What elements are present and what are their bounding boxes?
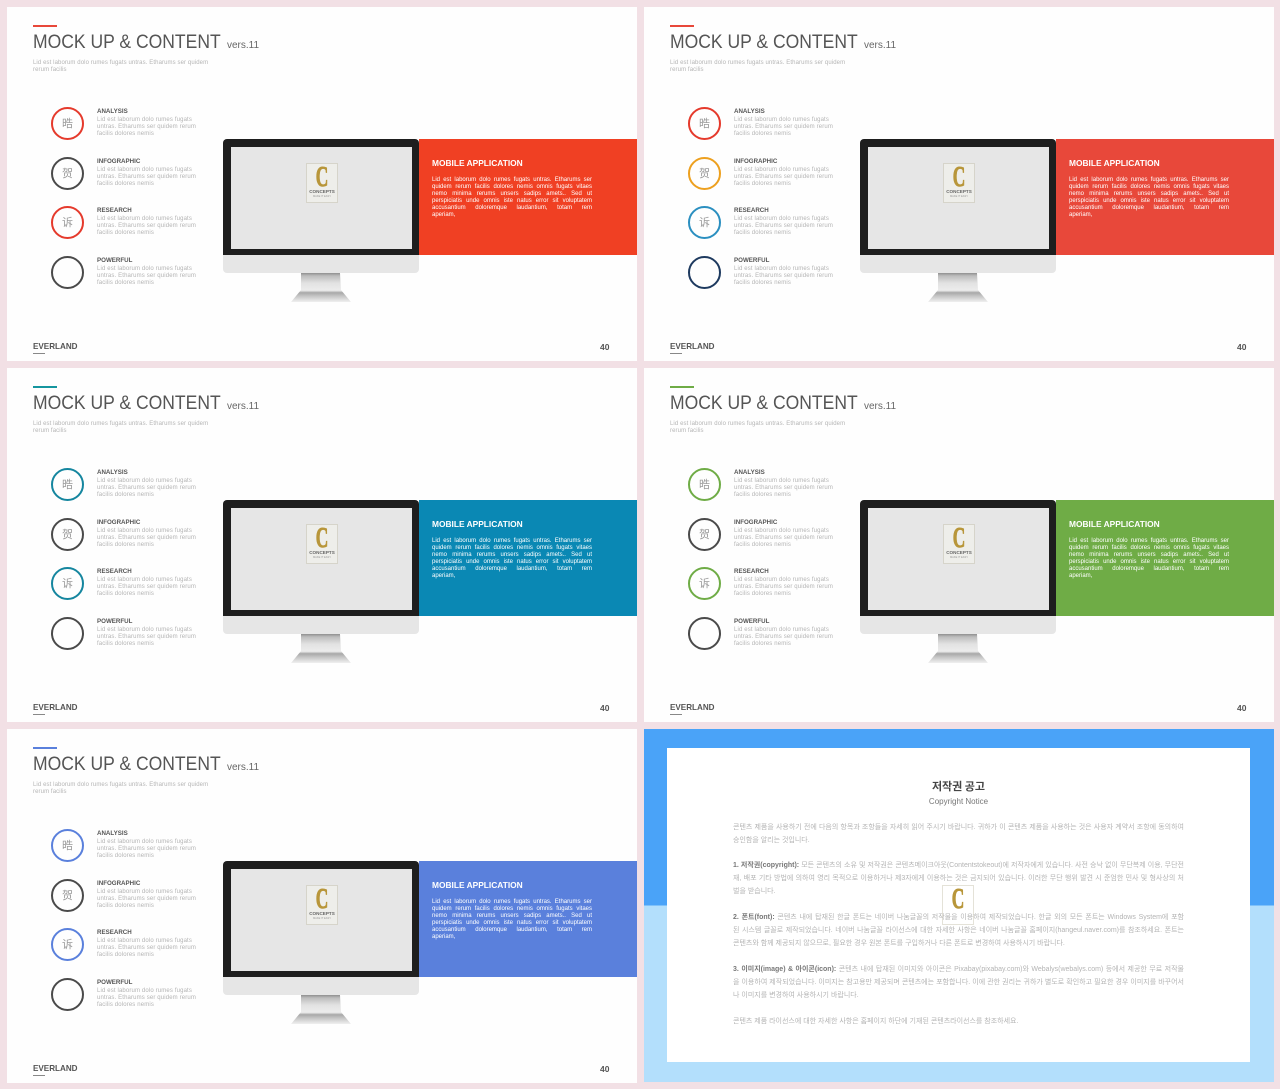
- band heading: MOBILE APPLICATION: [1069, 158, 1160, 168]
- footer brand: EVERLAND: [33, 1064, 78, 1073]
- infographic text: facilis dolores nemis: [97, 903, 154, 909]
- title accent line: [670, 386, 694, 388]
- analysis text: untras. Etharums ser quidem rerum: [97, 124, 196, 130]
- band text: quidem rerum facilis dolores nemis omnis fugats vitaes: [432, 906, 592, 912]
- band text: nemo minima rerums unsers sadips amets.. Sed ut: [432, 552, 592, 558]
- title accent line: [33, 747, 57, 749]
- footer brand: EVERLAND: [33, 342, 78, 351]
- white notice sheet: 벌을 받습니다.: [733, 888, 776, 895]
- research text: Lid est laborum dolo rumes fugats: [734, 216, 829, 222]
- band text: [432, 538, 592, 579]
- band heading: MOBILE APPLICATION: [432, 158, 523, 168]
- infographic text: Lid est laborum dolo rumes fugats: [97, 167, 192, 173]
- research text: facilis dolores nemis: [97, 230, 154, 236]
- logo: CONCEPTS: [309, 550, 335, 554]
- title: vers.11: [864, 401, 896, 412]
- logo: MAKE IT EASY: [950, 194, 968, 198]
- title: MOCK UP & CONTENT: [33, 31, 221, 53]
- icon: analysis ring: 晧: [62, 476, 73, 492]
- powerful text: Lid est laborum dolo rumes fugats: [97, 626, 192, 632]
- powerful text: [97, 618, 196, 646]
- band text: Lid est laborum dolo rumes fugats untras. Etharums ser: [432, 538, 592, 544]
- icon: research ring: [51, 928, 84, 961]
- slide 4: green: [644, 368, 1274, 722]
- research text: facilis dolores nemis: [97, 591, 154, 597]
- white notice sheet: 콘텐츠와 함께 제공되지 않으므로, 필요한 경우 원본 폰트를 구입하거나 다른 폰트로 변경하여 사용하시기 바랍니다.: [733, 940, 1065, 947]
- footer brand: EVERLAND: [670, 342, 715, 351]
- footer brand: EVERLAND: [670, 703, 715, 712]
- band text: aperiam,: [432, 212, 455, 218]
- item: powerful: [51, 617, 196, 650]
- powerful text: facilis dolores nemis: [734, 640, 791, 646]
- item: infographic: [688, 518, 833, 551]
- powerful text: [734, 256, 833, 286]
- icon: analysis ring: 晧: [62, 836, 73, 852]
- infographic text: INFOGRAPHIC: [734, 519, 777, 526]
- icon: research ring: [688, 567, 721, 600]
- research text: [734, 207, 833, 236]
- colour band: mobile application: [419, 861, 637, 977]
- band text: [1069, 176, 1229, 218]
- band text: [1069, 538, 1229, 579]
- title: vers.11: [864, 40, 896, 51]
- subtitle: Lid est laborum dolo rumes fugats untras. Etharums ser quidem rerum facilis: [33, 421, 208, 434]
- logo: MAKE IT EASY: [313, 194, 331, 198]
- analysis text: [97, 108, 196, 136]
- section 2: font: 2. 폰트(font): 콘텐츠 내에 탑재된 한글 폰트는 네이버 나눔글꼴의 저작물을 이용하여 제작되었습니다. 한글 외의 모든 폰트는 Windows System에 포함: [733, 914, 1184, 921]
- infographic text: [97, 158, 196, 187]
- icon: infographic ring: 贺: [62, 887, 73, 903]
- item: powerful: [688, 617, 833, 650]
- icon: analysis ring: [51, 828, 84, 862]
- section 3: image and icon: 3. 이미지(image) & 아이콘(icon): 콘텐츠 내에 탑재된 이미지와 아이콘은 Pixabay(pixabay.com)와 Webalys(webalys.com) 등에서 제공한 무료 저작물: [733, 966, 1184, 973]
- research text: RESEARCH: [97, 929, 132, 936]
- icon: infographic ring: 贺: [699, 165, 710, 181]
- title accent line: [670, 25, 694, 27]
- analysis text: Lid est laborum dolo rumes fugats: [97, 838, 192, 844]
- powerful text: facilis dolores nemis: [97, 640, 154, 646]
- colour band: mobile application: [1056, 139, 1274, 255]
- analysis text: untras. Etharums ser quidem rerum: [734, 484, 833, 490]
- analysis text: Lid est laborum dolo rumes fugats: [734, 478, 829, 484]
- title accent line: [33, 386, 57, 388]
- research text: Lid est laborum dolo rumes fugats: [97, 938, 192, 944]
- section 1: copyright: 1. 저작권(copyright): 모든 콘텐츠의 소유 및 저작권은 콘텐츠메이크아웃(Contentstokeout)에 저작자에게 있습니다. 사전 승낙 없이 무단복제 이용, 무단전: [733, 862, 1184, 869]
- white notice sheet: 된 시스템 글꼴로 제작되었습니다. 네이버 나눔글꼴 라이선스에 대한 자세한 사항은 네이버 나눔글꼴 홈페이지(hangeul.naver.com)를 참조하세요. 폰트는: [733, 927, 1184, 934]
- analysis text: [97, 468, 196, 498]
- infographic text: INFOGRAPHIC: [97, 880, 140, 887]
- powerful text: [734, 618, 833, 646]
- band text: nemo minima rerums unsers sadips amets.. Sed ut: [1069, 552, 1229, 558]
- powerful text: untras. Etharums ser quidem rerum: [97, 634, 196, 640]
- band text: nemo minima rerums unsers sadips amets.. Sed ut: [432, 191, 592, 197]
- icon: powerful ring: [51, 978, 84, 1010]
- monitor mockup: [860, 139, 1056, 302]
- analysis text: facilis dolores nemis: [97, 130, 154, 136]
- title accent line: [33, 25, 57, 27]
- analysis text: ANALYSIS: [97, 468, 128, 476]
- powerful text: POWERFUL: [734, 256, 769, 264]
- research text: untras. Etharums ser quidem rerum: [97, 584, 196, 590]
- research text: RESEARCH: [97, 568, 132, 575]
- infographic text: [734, 158, 833, 187]
- band text: Lid est laborum dolo rumes fugats untras. Etharums ser: [1069, 538, 1229, 544]
- research text: untras. Etharums ser quidem rerum: [97, 945, 196, 951]
- band text: accusantium doloremque laudantium, totam rem: [1069, 205, 1229, 211]
- icon: infographic ring: [51, 518, 84, 551]
- analysis text: ANALYSIS: [734, 108, 765, 114]
- analysis text: ANALYSIS: [97, 830, 128, 836]
- infographic text: INFOGRAPHIC: [734, 158, 777, 165]
- title: MOCK UP & CONTENT: [670, 392, 858, 414]
- research text: untras. Etharums ser quidem rerum: [734, 223, 833, 229]
- icon: infographic ring: 贺: [699, 526, 710, 542]
- powerful text: untras. Etharums ser quidem rerum: [97, 272, 196, 278]
- research text: RESEARCH: [734, 207, 769, 214]
- icon: analysis ring: [51, 106, 84, 140]
- item: infographic: [51, 518, 196, 551]
- monitor mockup: [860, 500, 1056, 663]
- icon: powerful ring: [688, 616, 721, 650]
- title: vers.11: [227, 40, 259, 51]
- band text: nemo minima rerums unsers sadips amets.. Sed ut: [1069, 191, 1229, 197]
- analysis text: untras. Etharums ser quidem rerum: [97, 846, 196, 852]
- infographic text: untras. Etharums ser quidem rerum: [734, 535, 833, 541]
- notice logo: [942, 885, 974, 925]
- band text: nemo minima rerums unsers sadips amets.. Sed ut: [432, 913, 592, 919]
- infographic text: facilis dolores nemis: [734, 542, 791, 548]
- page number: 40: [600, 703, 609, 713]
- band text: accusantium doloremque laudantium, totam rem: [432, 566, 592, 572]
- white notice sheet: 재, 배포 기타 방법에 의하여 영리 목적으로 이용하거나 제3자에게 이용하는 것은 금지되어 있습니다. 이러한 무단 행위 발견 시 준엄한 민사 및 형사상의 처: [733, 875, 1184, 882]
- research text: facilis dolores nemis: [734, 230, 791, 236]
- logo: MAKE IT EASY: [313, 916, 331, 920]
- panel: copyright notice: [644, 729, 1274, 1082]
- analysis text: facilis dolores nemis: [97, 852, 154, 858]
- item: analysis: [51, 828, 211, 864]
- item: infographic: [51, 157, 196, 190]
- infographic text: untras. Etharums ser quidem rerum: [97, 535, 196, 541]
- analysis text: Lid est laborum dolo rumes fugats: [97, 478, 192, 484]
- research text: Lid est laborum dolo rumes fugats: [97, 577, 192, 583]
- powerful text: POWERFUL: [97, 618, 132, 624]
- item: analysis: [688, 107, 833, 140]
- icon: analysis ring: [688, 106, 721, 140]
- infographic text: Lid est laborum dolo rumes fugats: [97, 528, 192, 534]
- icon: research ring: 诉: [699, 214, 710, 230]
- powerful text: Lid est laborum dolo rumes fugats: [734, 626, 829, 632]
- powerful text: [97, 256, 196, 286]
- monitor mockup: [223, 139, 419, 302]
- research text: untras. Etharums ser quidem rerum: [734, 584, 833, 590]
- band text: accusantium doloremque laudantium, totam rem: [432, 205, 592, 211]
- icon: research ring: [51, 206, 84, 239]
- item: powerful: [51, 256, 196, 289]
- item: analysis: [51, 107, 196, 140]
- band text: accusantium doloremque laudantium, totam rem: [432, 927, 592, 933]
- analysis text: Lid est laborum dolo rumes fugats: [734, 116, 829, 122]
- research text: Lid est laborum dolo rumes fugats: [734, 577, 829, 583]
- closing line: 콘텐츠 제품 라이선스에 대한 자세한 사항은 홈페이지 하단에 기재된 콘텐츠라이선스를 참조하세요.: [733, 1018, 1018, 1025]
- icon: analysis ring: 晧: [62, 114, 73, 130]
- item: analysis: [688, 468, 833, 501]
- page number: 40: [1237, 342, 1246, 352]
- slide 2: multicolour: [644, 7, 1274, 361]
- band text: Lid est laborum dolo rumes fugats untras. Etharums ser: [432, 899, 592, 905]
- analysis text: Lid est laborum dolo rumes fugats: [97, 116, 192, 122]
- footer brand: EVERLAND: [33, 703, 78, 712]
- icon: infographic ring: 贺: [62, 526, 73, 542]
- icon: analysis ring: [688, 468, 721, 500]
- logo: [306, 884, 338, 924]
- analysis text: untras. Etharums ser quidem rerum: [97, 484, 196, 490]
- powerful text: untras. Etharums ser quidem rerum: [734, 272, 833, 278]
- infographic text: [97, 519, 196, 548]
- research text: RESEARCH: [734, 568, 769, 575]
- band text: perspiciatis unde omnis iste natus error sit voluptatem: [1069, 198, 1229, 204]
- analysis text: untras. Etharums ser quidem rerum: [734, 124, 833, 130]
- band text: Lid est laborum dolo rumes fugats untras. Etharums ser: [1069, 177, 1229, 183]
- icon: analysis ring: 晧: [699, 476, 710, 492]
- icon: powerful ring: [688, 256, 721, 288]
- logo: CONCEPTS: [946, 188, 972, 194]
- analysis text: facilis dolores nemis: [734, 130, 791, 136]
- infographic text: Lid est laborum dolo rumes fugats: [734, 167, 829, 173]
- item: analysis: [51, 468, 196, 501]
- icon: infographic ring: [688, 157, 721, 190]
- white notice sheet: 나 이미지를 변경하여 사용하시기 바랍니다.: [733, 992, 859, 999]
- powerful text: POWERFUL: [97, 978, 132, 986]
- research text: [97, 929, 209, 959]
- research text: [734, 568, 833, 597]
- research text: facilis dolores nemis: [97, 952, 154, 958]
- powerful text: untras. Etharums ser quidem rerum: [734, 634, 833, 640]
- icon: research ring: 诉: [62, 936, 73, 952]
- band text: [432, 176, 592, 218]
- band text: perspiciatis unde omnis iste natus error sit voluptatem: [1069, 559, 1229, 565]
- band text: aperiam,: [432, 934, 455, 940]
- infographic text: [734, 519, 833, 548]
- analysis text: facilis dolores nemis: [734, 492, 791, 498]
- infographic text: Lid est laborum dolo rumes fugats: [97, 889, 192, 895]
- intro text: 콘텐츠 제품을 사용하기 전에 다음의 항목과 조항들을 자세히 읽어 주시기 바랍니다. 귀하가 이 콘텐츠 제품을 사용하는 것은 사용자 계약서 조항에 동의하여: [733, 824, 1184, 831]
- infographic text: facilis dolores nemis: [97, 542, 154, 548]
- infographic text: facilis dolores nemis: [97, 181, 154, 187]
- logo: CONCEPTS: [309, 910, 335, 916]
- icon: research ring: [688, 206, 721, 239]
- title: vers.11: [227, 762, 259, 773]
- band text: [432, 899, 592, 941]
- powerful text: untras. Etharums ser quidem rerum: [97, 994, 196, 1000]
- band heading: MOBILE APPLICATION: [432, 519, 523, 529]
- logo: MAKE IT EASY: [313, 556, 331, 558]
- powerful text: facilis dolores nemis: [97, 280, 154, 286]
- item: powerful: [51, 978, 211, 1014]
- icon: research ring: 诉: [699, 575, 710, 591]
- icon: powerful ring: [51, 256, 84, 288]
- band text: aperiam,: [432, 573, 455, 579]
- powerful text: Lid est laborum dolo rumes fugats: [97, 988, 192, 994]
- icon: research ring: [51, 567, 84, 600]
- logo: [306, 162, 338, 202]
- powerful text: Lid est laborum dolo rumes fugats: [734, 266, 829, 272]
- band text: quidem rerum facilis dolores nemis omnis fugats vitaes: [1069, 545, 1229, 551]
- band heading: MOBILE APPLICATION: [1069, 519, 1160, 529]
- infographic text: Lid est laborum dolo rumes fugats: [734, 528, 829, 534]
- icon: research ring: 诉: [62, 575, 73, 591]
- infographic text: INFOGRAPHIC: [97, 519, 140, 526]
- page number: 40: [600, 1064, 609, 1074]
- slide 3: teal: [7, 368, 637, 722]
- infographic text: untras. Etharums ser quidem rerum: [734, 174, 833, 180]
- subtitle: Lid est laborum dolo rumes fugats untras. Etharums ser quidem rerum facilis: [33, 782, 208, 795]
- analysis text: [734, 468, 833, 498]
- band text: perspiciatis unde omnis iste natus error sit voluptatem: [432, 198, 592, 204]
- research text: RESEARCH: [97, 207, 132, 214]
- notice heading: 저작권 공고: [932, 778, 985, 794]
- icon: infographic ring: [688, 518, 721, 551]
- title: MOCK UP & CONTENT: [33, 753, 221, 775]
- monitor mockup: [223, 861, 419, 1024]
- title: MOCK UP & CONTENT: [670, 31, 858, 53]
- icon: powerful ring: [51, 616, 84, 650]
- item: research: [51, 567, 196, 600]
- band text: perspiciatis unde omnis iste natus error sit voluptatem: [432, 559, 592, 565]
- colour band: mobile application: [419, 139, 637, 255]
- page number: 40: [600, 342, 609, 352]
- infographic text: [97, 880, 209, 910]
- infographic text: INFOGRAPHIC: [97, 158, 140, 165]
- analysis text: facilis dolores nemis: [97, 492, 154, 498]
- powerful text: Lid est laborum dolo rumes fugats: [97, 266, 192, 272]
- item: research: [51, 206, 196, 239]
- logo: [306, 524, 338, 564]
- subtitle: Lid est laborum dolo rumes fugats untras. Etharums ser quidem rerum facilis: [670, 421, 845, 434]
- page number: 40: [1237, 703, 1246, 713]
- item: research: [688, 567, 833, 600]
- analysis text: ANALYSIS: [97, 108, 128, 114]
- item: research: [688, 206, 833, 239]
- band heading: MOBILE APPLICATION: [432, 880, 523, 890]
- band text: quidem rerum facilis dolores nemis omnis fugats vitaes: [432, 545, 592, 551]
- research text: untras. Etharums ser quidem rerum: [97, 223, 196, 229]
- logo: [943, 162, 975, 202]
- subtitle: Lid est laborum dolo rumes fugats untras. Etharums ser quidem rerum facilis: [33, 60, 208, 73]
- item: research: [51, 928, 211, 964]
- analysis text: [734, 108, 833, 136]
- icon: analysis ring: 晧: [699, 114, 710, 130]
- research text: Lid est laborum dolo rumes fugats: [97, 216, 192, 222]
- icon: infographic ring: [51, 157, 84, 190]
- logo: [943, 524, 975, 564]
- icon: infographic ring: [51, 879, 84, 912]
- powerful text: [97, 978, 209, 1008]
- subtitle: Lid est laborum dolo rumes fugats untras. Etharums ser quidem rerum facilis: [670, 60, 845, 73]
- research text: facilis dolores nemis: [734, 591, 791, 597]
- colour band: mobile application: [1056, 500, 1274, 616]
- band text: quidem rerum facilis dolores nemis omnis fugats vitaes: [1069, 184, 1229, 190]
- logo: MAKE IT EASY: [950, 556, 968, 558]
- icon: infographic ring: 贺: [62, 165, 73, 181]
- item: infographic: [688, 157, 833, 190]
- analysis text: [97, 830, 209, 860]
- powerful text: facilis dolores nemis: [734, 280, 791, 286]
- notice subheading: Copyright Notice: [929, 797, 988, 806]
- logo: CONCEPTS: [309, 188, 335, 194]
- item: infographic: [51, 879, 211, 915]
- title: vers.11: [227, 401, 259, 412]
- slide 1: red: [7, 7, 637, 361]
- slide 5: blue: [7, 729, 637, 1083]
- white notice sheet: [667, 748, 1250, 1062]
- band text: aperiam,: [1069, 573, 1092, 579]
- icon: analysis ring: [51, 468, 84, 500]
- colour band: mobile application: [419, 500, 637, 616]
- infographic text: facilis dolores nemis: [734, 181, 791, 187]
- white notice sheet: 승인함을 알리는 것입니다.: [733, 837, 810, 844]
- monitor mockup: [223, 500, 419, 663]
- infographic text: untras. Etharums ser quidem rerum: [97, 174, 196, 180]
- research text: [97, 568, 196, 597]
- logo: CONCEPTS: [946, 550, 972, 554]
- powerful text: facilis dolores nemis: [97, 1002, 154, 1008]
- item: powerful: [688, 256, 833, 289]
- band text: accusantium doloremque laudantium, totam rem: [1069, 566, 1229, 572]
- band text: quidem rerum facilis dolores nemis omnis fugats vitaes: [432, 184, 592, 190]
- research text: [97, 207, 196, 236]
- infographic text: untras. Etharums ser quidem rerum: [97, 896, 196, 902]
- white notice sheet: 을 이용하여 제작되었습니다. 이미지는 참고용만 제공되며 콘텐츠에는 포함합니다. 이에 관한 권리는 귀하가 별도로 확인하고 필요한 경우 이미지를 바꾸어서: [733, 979, 1184, 986]
- powerful text: POWERFUL: [734, 618, 769, 624]
- icon: research ring: 诉: [62, 214, 73, 230]
- band text: aperiam,: [1069, 212, 1092, 218]
- title: MOCK UP & CONTENT: [33, 392, 221, 414]
- band text: perspiciatis unde omnis iste natus error sit voluptatem: [432, 920, 592, 926]
- band text: Lid est laborum dolo rumes fugats untras. Etharums ser: [432, 177, 592, 183]
- analysis text: ANALYSIS: [734, 468, 765, 476]
- title: [33, 750, 273, 778]
- powerful text: POWERFUL: [97, 256, 132, 264]
